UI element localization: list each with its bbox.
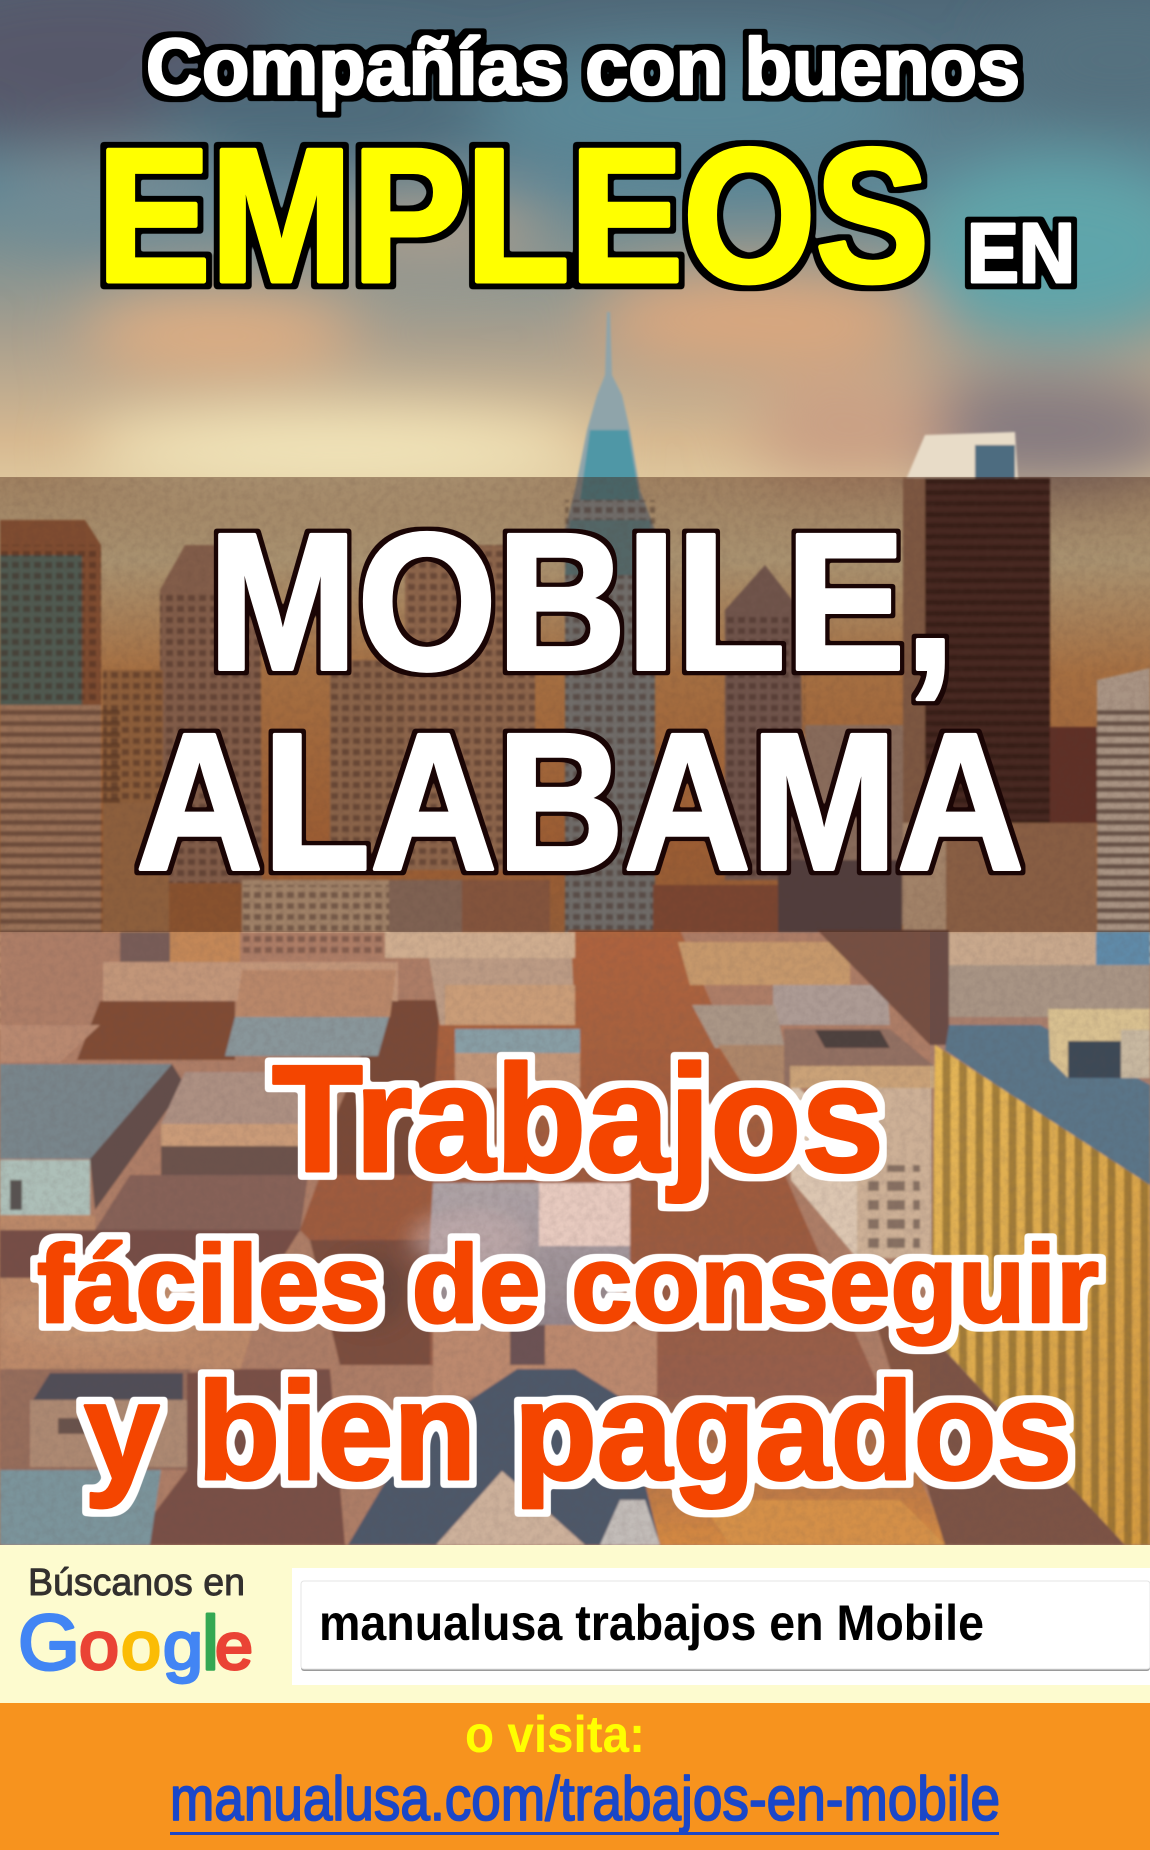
street-side light wall (791, 1080, 857, 1258)
icon: Google wordmark: G (18, 1598, 80, 1686)
sky with clouds (0, 0, 1150, 935)
heading: ALABAMA: ALABAMA (136, 693, 1024, 911)
heading: EN: EN (967, 206, 1075, 300)
rooftop box (1048, 1009, 1150, 1078)
spire tower (565, 312, 655, 960)
slate roof with gable (348, 1369, 660, 1545)
subheading: Trabajos: Trabajos (272, 1034, 884, 1204)
lower city blocks and streets (0, 930, 1150, 1547)
back buildings (160, 545, 262, 900)
soft shadows (0, 1210, 530, 1346)
translucent dark band (0, 477, 1150, 932)
subheading: y bien pagados: y bien pagados (84, 1354, 1072, 1509)
photo grain (0, 478, 1150, 1545)
bottom left buildings (0, 1369, 190, 1470)
low centre blocks (103, 803, 169, 933)
label: o visita: o visita: (465, 1706, 645, 1764)
panel: Google search band (0, 1545, 1150, 1703)
mid-left roofs (161, 1072, 305, 1124)
subheading: fáciles de conseguir: fáciles de conseguir (37, 1223, 1099, 1346)
skyline buildings (0, 312, 1150, 1030)
icon: Google wordmark: o (121, 1608, 161, 1684)
upper right blocks (678, 942, 850, 985)
main street (300, 930, 950, 1545)
search input box (301, 1581, 1150, 1671)
right dark tower (903, 432, 1050, 933)
left tower (0, 520, 120, 1030)
icon: Google wordmark: o (79, 1608, 119, 1684)
icon: Google wordmark: g (163, 1608, 203, 1684)
tower foot and top-left roofs (103, 962, 398, 1001)
label: Búscanos en: Búscanos en (28, 1562, 245, 1604)
centre roof building (425, 1183, 630, 1325)
icon: Google wordmark (18, 1598, 253, 1686)
gold building (931, 1025, 1150, 1545)
upper centre block (429, 958, 575, 1025)
icon: Google wordmark: e (215, 1609, 253, 1683)
panel: website band (0, 1703, 1150, 1850)
warm tint over the street level (0, 932, 930, 1545)
heading: MOBILE,: MOBILE, (208, 493, 955, 711)
search query text: manualusa trabajos en Mobile (319, 1595, 984, 1651)
left grey-blue roof (0, 1064, 172, 1159)
blue roof (225, 1017, 389, 1056)
heading: EMPLEOS: EMPLEOS (97, 110, 929, 322)
heading: Compañías con buenos: Compañías con buenos (146, 22, 1020, 111)
icon: Google wordmark: l (202, 1601, 219, 1686)
link: website URL: manualusa.com/trabajos-en-mobile (170, 1765, 1000, 1834)
far right tower (1097, 668, 1150, 965)
